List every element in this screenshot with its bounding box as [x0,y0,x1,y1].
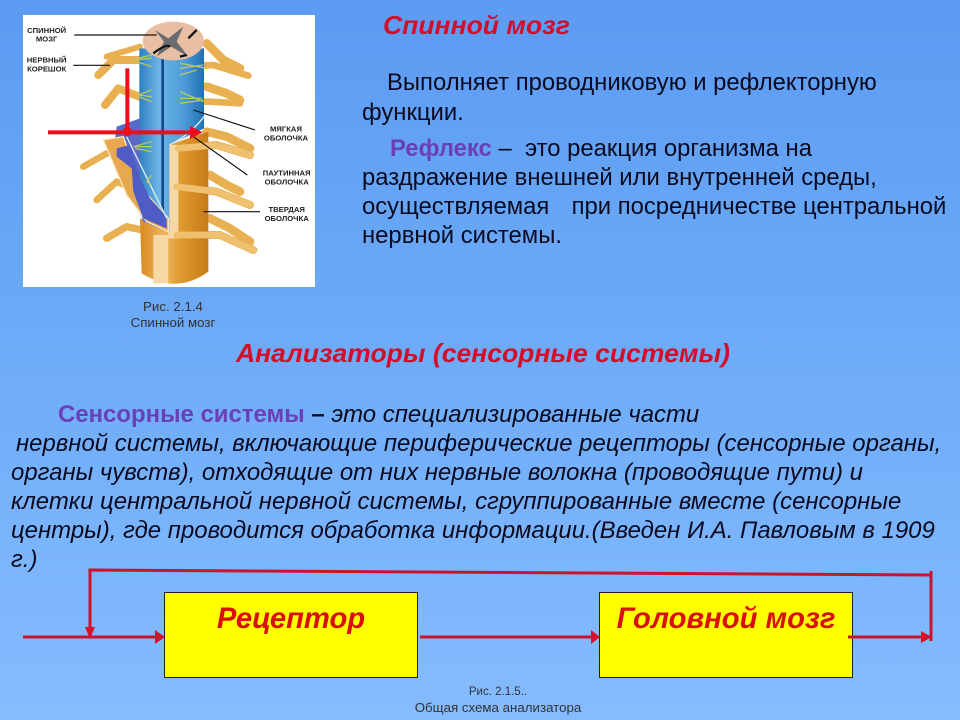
anatomical labels: НЕРВНЫЙ [27,55,67,64]
anatomical labels: ОБОЛОЧКА [264,134,309,143]
anatomical labels: ТВЕРДАЯ [268,205,305,214]
root over sheath [177,145,253,250]
anatomical labels: ПАУТИННАЯ [263,169,311,178]
box: brain [599,592,853,678]
blue spinal cord [139,48,204,232]
heading: analyzers: Анализаторы (сенсорные системы) [236,338,730,368]
anatomical labels: МОЗГ [36,35,58,44]
text: reflex definition [362,135,946,249]
box: receptor: Рецептор [217,603,365,635]
caption: figure 2.1.5 [415,686,582,715]
caption: figure 2.1.4: Рис. 2.1.4 [143,299,203,314]
anatomical labels: ОБОЛОЧКА [265,177,309,186]
text: spinal cord functions: функции. [362,99,464,126]
caption: figure 2.1.5: Рис. 2.1.5.. [469,686,527,698]
arachnoid membrane [113,118,167,232]
heading: spinal cord: Спинной мозг [383,10,570,40]
text: sensory systems definition: нервной системы, включающие периферические рецепторы (сенсорные органы, [16,430,941,457]
text: sensory systems definition: центры), где проводится обработка информации.(Введен И.А. Павловым в 1909 [11,517,935,544]
leader lines [73,35,260,212]
box: brain: Головной мозг [617,603,835,635]
text: reflex definition: раздражение внешней или внутренней среды, [362,164,877,191]
red arrows [48,68,197,132]
text: reflex definition: нервной системы. [362,222,562,249]
nerve roots [83,43,253,250]
anatomical labels [27,26,311,223]
green rootlets [133,55,207,185]
text: sensory systems definition [11,401,941,573]
cross-section of cord [143,22,204,60]
text: spinal cord functions: Выполняет проводниковую и рефлекторную [387,69,877,96]
anatomical labels: КОРЕШОК [27,65,67,74]
text: spinal cord functions [362,69,877,126]
anatomical labels: СПИННОЙ [27,26,66,35]
figure: spinal cord illustration [23,15,315,287]
caption: figure 2.1.4 [131,299,215,330]
box: receptor [164,592,418,678]
caption: figure 2.1.4: Спинной мозг [131,315,215,330]
caption: figure 2.1.5: Общая схема анализатора [415,700,581,715]
text: sensory systems definition: клетки центральной нервной системы, сгруппированные вместе (сенсорные [11,488,901,515]
text: sensory systems definition: г.) [11,546,37,573]
orange dura sheath [140,132,208,284]
anatomical labels: ОБОЛОЧКА [265,214,309,223]
text: reflex definition: осуществляемая при посредничестве центральной [362,193,946,220]
text: reflex definition: Рефлекс – это реакция организма на [390,135,812,162]
anatomical labels: МЯГКАЯ [270,125,302,134]
text: sensory systems definition: органы чувств), отходящие от них нервные волокна (проводящие пути) и [11,459,863,486]
text: sensory systems definition: Сенсорные системы – это специализированные части [58,401,699,428]
